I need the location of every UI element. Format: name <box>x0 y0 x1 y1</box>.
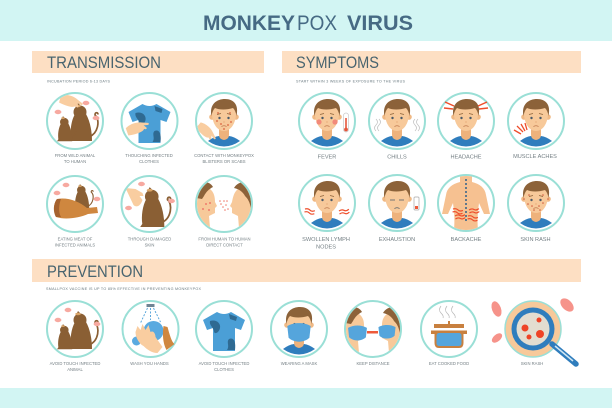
label: NODES <box>316 244 336 250</box>
label: INFECTED ANIMALS <box>55 242 95 248</box>
item: skin rash <box>508 175 564 243</box>
icon: swollen neck face <box>299 175 355 231</box>
title: VIRUS <box>347 12 413 35</box>
icon: two people in profile <box>196 176 252 232</box>
label: EAT COOKED FOOD <box>429 361 469 366</box>
label: FROM WILD ANIMAL <box>55 153 96 158</box>
icon: monkey and hand <box>122 176 178 232</box>
item: avoid infected clothes <box>196 301 252 372</box>
title: POX <box>297 12 337 35</box>
top band <box>0 0 612 41</box>
label: MUSCLE ACHES <box>513 154 557 160</box>
bottom band <box>0 388 612 408</box>
icon: muscle ache face <box>508 93 564 149</box>
label: AVOID TOUCH INFECTED <box>199 361 249 366</box>
label: CHILLS <box>387 154 407 160</box>
label: WASH YOU HANDS <box>130 361 169 366</box>
heading: prevention: PREVENTION <box>47 263 143 281</box>
label: FROM HUMAN TO HUMAN <box>198 236 251 242</box>
label: THOUCHING INFECTED <box>125 153 173 158</box>
item: touching clothes <box>122 93 178 164</box>
icon: face with blisters <box>195 93 252 149</box>
label: SWOLLEN LYMPH <box>302 237 350 243</box>
icon: monkeys and hand <box>47 93 103 149</box>
label: CONTACT WITH MONKEYPOX <box>194 153 254 158</box>
heading: prevention <box>32 259 581 282</box>
heading: transmission <box>32 51 264 73</box>
label: FEVER <box>318 154 336 160</box>
panel: prevention <box>32 259 581 372</box>
label: WEARING A MASK <box>281 361 317 366</box>
label: BLISTERS OR SCABS <box>202 159 246 164</box>
icon: cooking pot <box>421 301 477 357</box>
icon: shivering face <box>369 93 425 149</box>
label: THROUGH DAMAGED <box>128 236 171 242</box>
icon: stained shirt and hand <box>122 93 178 149</box>
icon: monkeys <box>47 301 103 357</box>
item: keep distance <box>345 301 401 366</box>
label: ANIMAL <box>67 367 83 372</box>
item: wearing a mask <box>271 301 327 366</box>
item: from wild animal <box>47 93 103 164</box>
label: AVOID TOUCH INFECTED <box>50 361 100 366</box>
item: contact with blisters <box>194 93 254 164</box>
icon: masked people apart <box>345 301 401 357</box>
icon: face with rash <box>508 175 564 231</box>
item: avoid touching animal <box>47 301 103 372</box>
subheading: onset: START WITHIN 3 WEEKS OF EXPOSURE TO THE VIRUS <box>296 80 406 84</box>
subheading: vaccine: SMALLPOX VACCINE IS UP TO 85% EFFECTIVE IN PREVENTING MONKEYPOX <box>46 287 202 291</box>
panel: symptoms <box>282 51 581 250</box>
icon: back with spine <box>438 175 494 231</box>
icon: stained shirt <box>196 301 252 357</box>
title <box>203 12 413 35</box>
item: headache <box>438 93 494 160</box>
item: human to human <box>196 176 252 248</box>
item: muscle aches <box>508 93 564 160</box>
label: HEADACHE <box>450 154 482 160</box>
item: wash hands <box>122 301 178 366</box>
subheading: incubation: INCUBATION PERIOD 6-13 DAYS <box>47 80 111 84</box>
label: SKIN RASH <box>521 361 543 366</box>
icon: masked man <box>271 301 327 357</box>
item: skin rash magnifier <box>490 296 576 366</box>
title: MONKEY <box>203 12 295 35</box>
label: EXHAUSTION <box>379 237 415 243</box>
heading: symptoms <box>282 51 581 73</box>
label: EATING MEAT OF <box>58 236 93 242</box>
label: DIRECT CONTACT <box>206 242 243 248</box>
label: SKIN <box>145 242 154 248</box>
icon: washing hands <box>122 301 178 357</box>
label: TO HUMAN <box>64 159 86 164</box>
label: CLOTHES <box>214 367 234 372</box>
icon: magnifier over rash <box>490 296 576 364</box>
item: eat cooked food <box>421 301 477 366</box>
item: exhaustion <box>369 175 425 243</box>
icon: fever face and thermometer <box>299 93 355 149</box>
panel: transmission <box>32 51 264 248</box>
label: SKIN RASH <box>520 237 551 243</box>
item: eating meat <box>47 176 103 248</box>
item: fever <box>299 93 355 160</box>
item: backache <box>438 175 494 243</box>
icon: headache face <box>438 93 494 149</box>
heading: transmission: TRANSMISSION <box>47 54 161 72</box>
item: chills <box>369 93 425 160</box>
label: BACKACHE <box>451 237 482 243</box>
item: swollen lymph nodes <box>299 175 355 250</box>
item: damaged skin <box>122 176 178 248</box>
label: KEEP DISTANCE <box>356 361 390 366</box>
icon: meat leg and monkey <box>47 176 103 232</box>
icon: tired face and battery <box>369 175 425 231</box>
heading: symptoms: SYMPTOMS <box>296 54 379 72</box>
label: CLOTHES <box>139 159 159 164</box>
